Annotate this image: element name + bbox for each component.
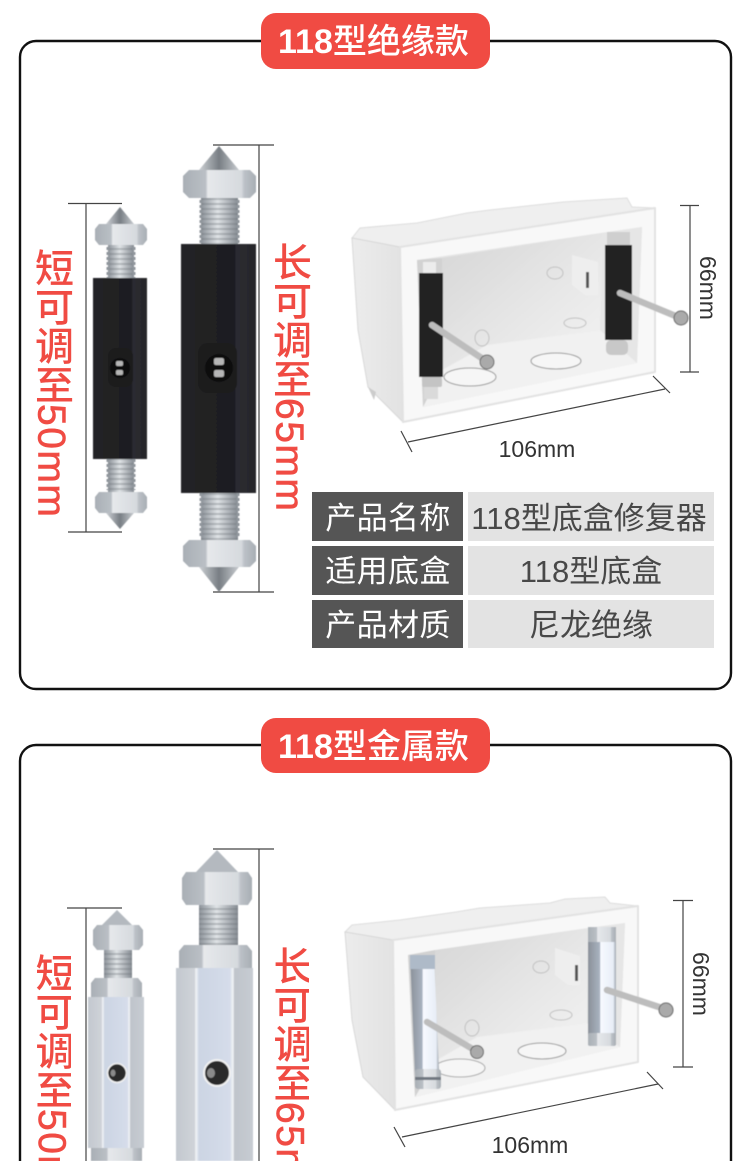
dimension: 106mm width [401, 376, 670, 462]
badge: metal title [261, 718, 490, 773]
icon: short black bolt [93, 207, 147, 529]
dimension line: long bolt [213, 145, 274, 592]
icon: long metal bolt [176, 850, 253, 1161]
row: product name [312, 492, 714, 541]
row: applicable box [312, 546, 714, 595]
row: product name: 产品名称 [325, 501, 451, 536]
dimension: 66mm height [673, 900, 714, 1067]
dimension: 66mm height: 66mm [688, 952, 714, 1016]
table: product specs [312, 492, 714, 648]
dimension: 106mm width [394, 1072, 663, 1158]
illustration: junction box with black repair bolts [352, 198, 688, 422]
dimension line: short bolt [68, 204, 122, 532]
row: material: 尼龙绝缘 [529, 608, 653, 643]
dimension: 66mm height [680, 206, 721, 372]
dimension line: short metal bolt [67, 908, 122, 1161]
label: short adjustable to 50mm: 短可调至 50mm [30, 248, 73, 518]
row: material [312, 600, 714, 648]
row: applicable box: 适用底盒 [325, 554, 451, 589]
dimension: 66mm height: 66mm [695, 256, 721, 320]
badge: insulated title: 118型绝缘款 [278, 23, 469, 61]
badge: metal title: 118型金属款 [278, 728, 469, 766]
dimension: 106mm width: 106mm [492, 1132, 568, 1158]
label: long adjustable to 65mm: 长可调至 65mm [268, 242, 311, 512]
panel: insulated model [20, 13, 731, 689]
row: applicable box: 118型底盒 [520, 554, 662, 589]
dimension: 106mm width: 106mm [499, 436, 575, 462]
dimension line: long metal bolt [213, 849, 274, 1161]
icon: long black bolt [181, 146, 256, 592]
row: material: 产品材质 [325, 608, 451, 643]
illustration: junction box with metal repair bolts [345, 897, 673, 1110]
badge: insulated title [261, 13, 490, 69]
row: product name: 118型底盒修复器 [471, 501, 707, 536]
panel: metal model [20, 718, 731, 1161]
icon: short metal bolt [88, 910, 144, 1161]
